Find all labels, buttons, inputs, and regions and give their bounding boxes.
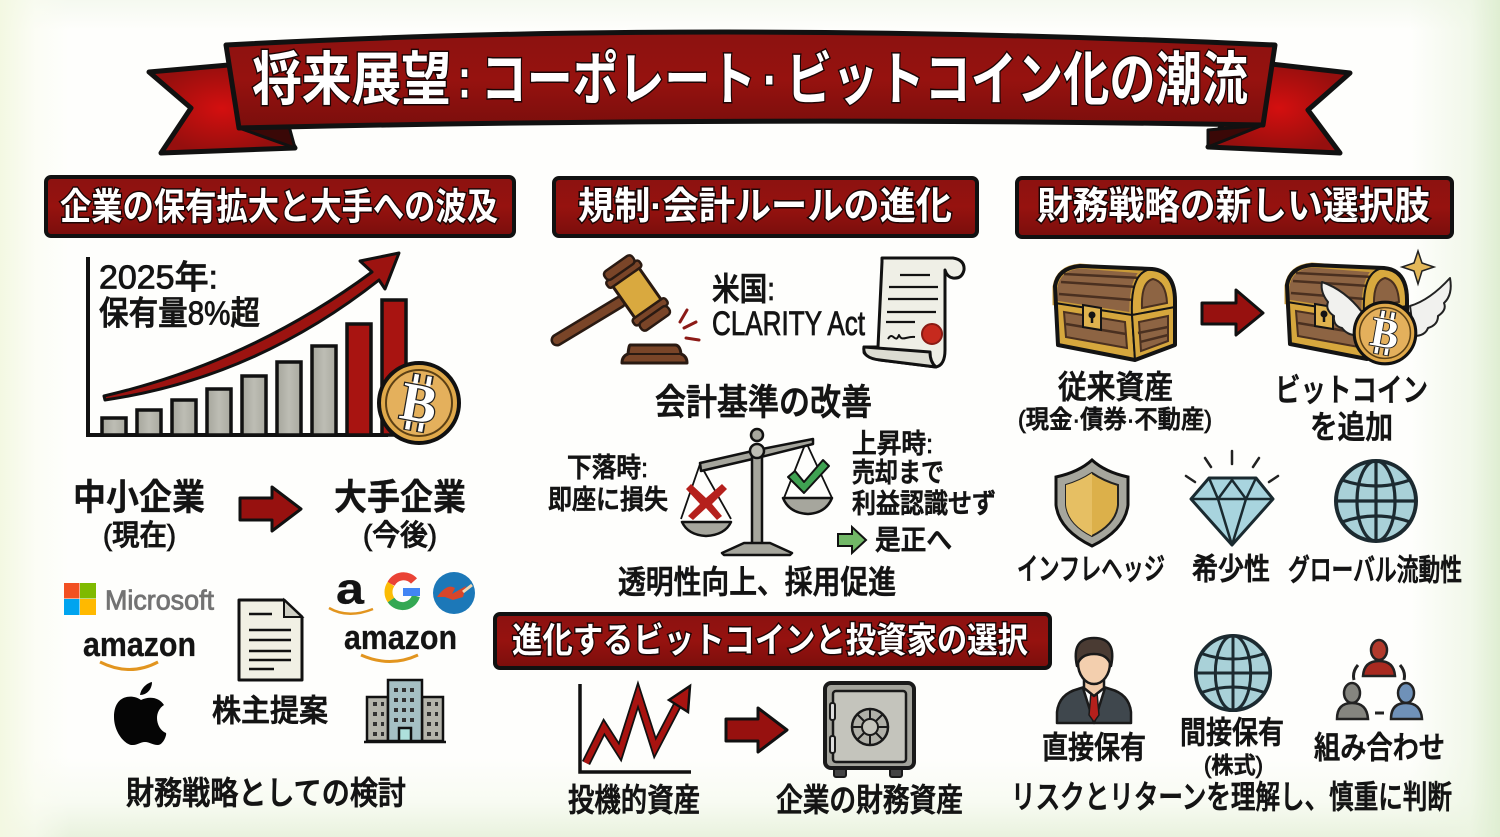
title banner: : <box>458 46 471 110</box>
label: direct holding: 直接保有 <box>1042 730 1146 766</box>
logo: apple <box>114 682 166 745</box>
label: decline: 下落時: <box>567 453 648 483</box>
logo: microsoft <box>64 583 214 616</box>
heading: regulation: 規制·会計ルールの進化 <box>578 186 952 228</box>
label: indirect holding: 間接保有 <box>1180 716 1284 750</box>
icon: globe <box>1336 461 1416 541</box>
icon: globe indirect <box>1196 636 1270 710</box>
heading: evolving bitcoin <box>495 614 1050 668</box>
icon: three people <box>1337 640 1422 719</box>
heading: holdings: 企業の保有拡大と大手への波及 <box>60 186 498 228</box>
logo: amazon right: amazon <box>344 619 457 657</box>
label: speculative asset: 投機的資産 <box>568 782 700 818</box>
label: immediate loss: 即座に損失 <box>548 485 668 515</box>
heading: regulation <box>554 178 977 236</box>
chart label: 2025: 2025年: <box>99 258 218 296</box>
logo: google <box>388 576 416 606</box>
arrow: correction <box>838 527 866 553</box>
heading: evolving bitcoin: 進化するビットコインと投資家の選択 <box>512 622 1028 660</box>
panel: evolving bitcoin and investor choice <box>495 614 1452 818</box>
icon: safe <box>825 683 914 777</box>
arrow: speculation to treasury <box>726 708 787 752</box>
logo: microsoft: Microsoft <box>105 584 214 616</box>
label: rise: 上昇時: <box>852 429 933 459</box>
chart label: over 8 percent: 保有量8%超 <box>99 294 260 332</box>
label: corporate treasury asset: 企業の財務資産 <box>776 782 963 818</box>
icon: businessperson <box>1057 638 1131 723</box>
label: until sale: 売却まで <box>852 458 944 488</box>
icon: document <box>239 600 302 680</box>
label: inflation hedge: インフレヘッジ <box>1017 554 1165 586</box>
label: cash bonds real estate: (現金·債券·不動産) <box>1018 406 1212 434</box>
label: bitcoin: ビットコイン <box>1275 372 1428 408</box>
label: consideration as financial strategy: 財務戦略としての検討 <box>126 775 406 811</box>
panel: regulation and accounting <box>548 178 996 600</box>
label: scarcity: 希少性 <box>1192 554 1270 586</box>
arrow: small to large <box>240 487 301 531</box>
icon: chest with winged coin <box>1287 251 1451 364</box>
icon: diamond <box>1186 451 1278 545</box>
label: transparency: 透明性向上、採用促進 <box>618 564 896 600</box>
label: current: (現在) <box>103 519 176 552</box>
logo: amazon left: amazon <box>83 626 196 664</box>
logo: amazon a <box>329 564 373 614</box>
title banner: ビットコイン化の潮流 <box>786 48 1248 112</box>
bar chart: holdings growth <box>88 253 459 443</box>
logo: amazon a: a <box>336 564 365 614</box>
label: future: (今後) <box>363 519 437 552</box>
icon: shield <box>1056 460 1128 546</box>
icon: treasure chest <box>1055 266 1175 360</box>
heading: options: 財務戦略の新しい選択肢 <box>1037 186 1430 228</box>
icon: balance scale <box>681 429 832 555</box>
icon: office building <box>364 680 446 742</box>
title banner <box>149 32 1350 153</box>
label: no profit recognition: 利益認識せず <box>852 489 996 519</box>
icon: gavel <box>557 252 699 363</box>
label: add: を追加 <box>1310 409 1393 445</box>
label: stocks: (株式) <box>1204 752 1263 778</box>
panel: financial strategy options <box>1017 178 1462 588</box>
arrow: add bitcoin <box>1202 290 1263 335</box>
label: combination: 組み合わせ <box>1314 730 1445 766</box>
label: correction: 是正へ <box>875 524 952 556</box>
icon: speculative line chart <box>580 684 691 772</box>
icon: scroll <box>864 258 964 367</box>
label: traditional assets: 従来資産 <box>1058 369 1173 405</box>
label: accounting standards: 会計基準の改善 <box>655 382 872 422</box>
label: clarity act: CLARITY Act <box>712 305 865 343</box>
label: shareholder proposal: 株主提案 <box>212 694 328 728</box>
logo: blue circle <box>433 572 475 614</box>
heading: options <box>1017 178 1452 237</box>
heading: holdings <box>46 177 514 236</box>
label: large companies: 大手企業 <box>334 476 466 518</box>
label: small companies: 中小企業 <box>73 476 205 518</box>
title banner: コーポレート <box>481 48 756 112</box>
title banner: 将来展望 <box>252 48 451 112</box>
panel: corporate holdings expansion <box>46 177 514 811</box>
label: USA: 米国: <box>712 271 775 307</box>
title banner: · <box>763 48 778 112</box>
